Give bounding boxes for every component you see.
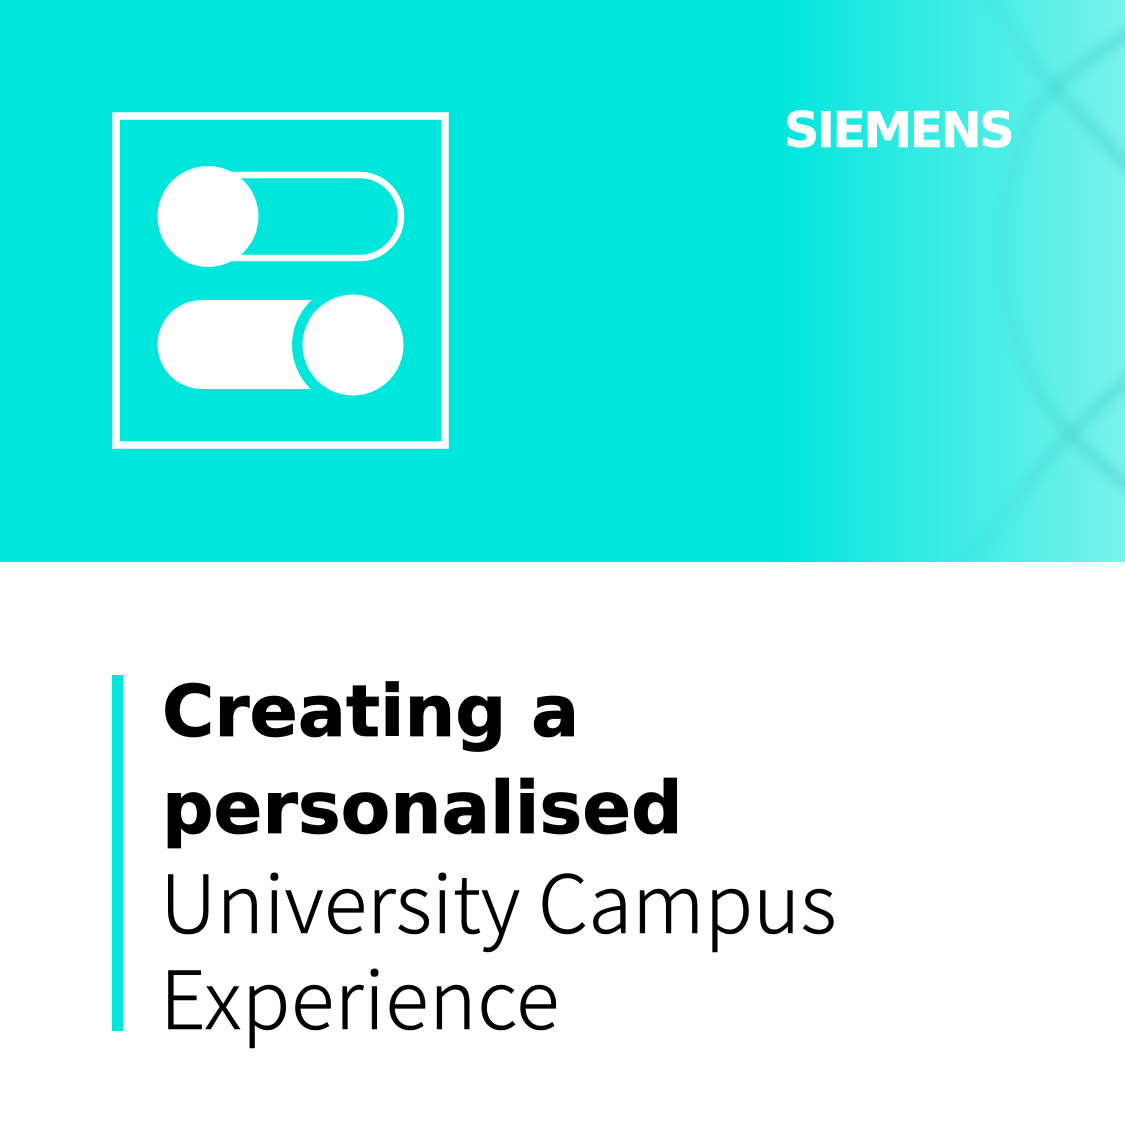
icon frame bbox=[116, 116, 445, 445]
title bbox=[160, 670, 837, 1053]
title line 4: Experience bbox=[160, 937, 560, 1053]
title line 3: University Campus bbox=[160, 841, 837, 957]
logo: Siemens: SIEMENS bbox=[784, 102, 1012, 159]
title line 1: Creating a bbox=[162, 670, 579, 753]
icon: toggle switches bbox=[112, 112, 449, 449]
hero banner bbox=[0, 0, 1125, 562]
top toggle bbox=[158, 166, 401, 267]
accent bar bbox=[112, 675, 123, 1031]
title line 2: personalised bbox=[162, 766, 683, 850]
bottom toggle bbox=[158, 284, 414, 406]
